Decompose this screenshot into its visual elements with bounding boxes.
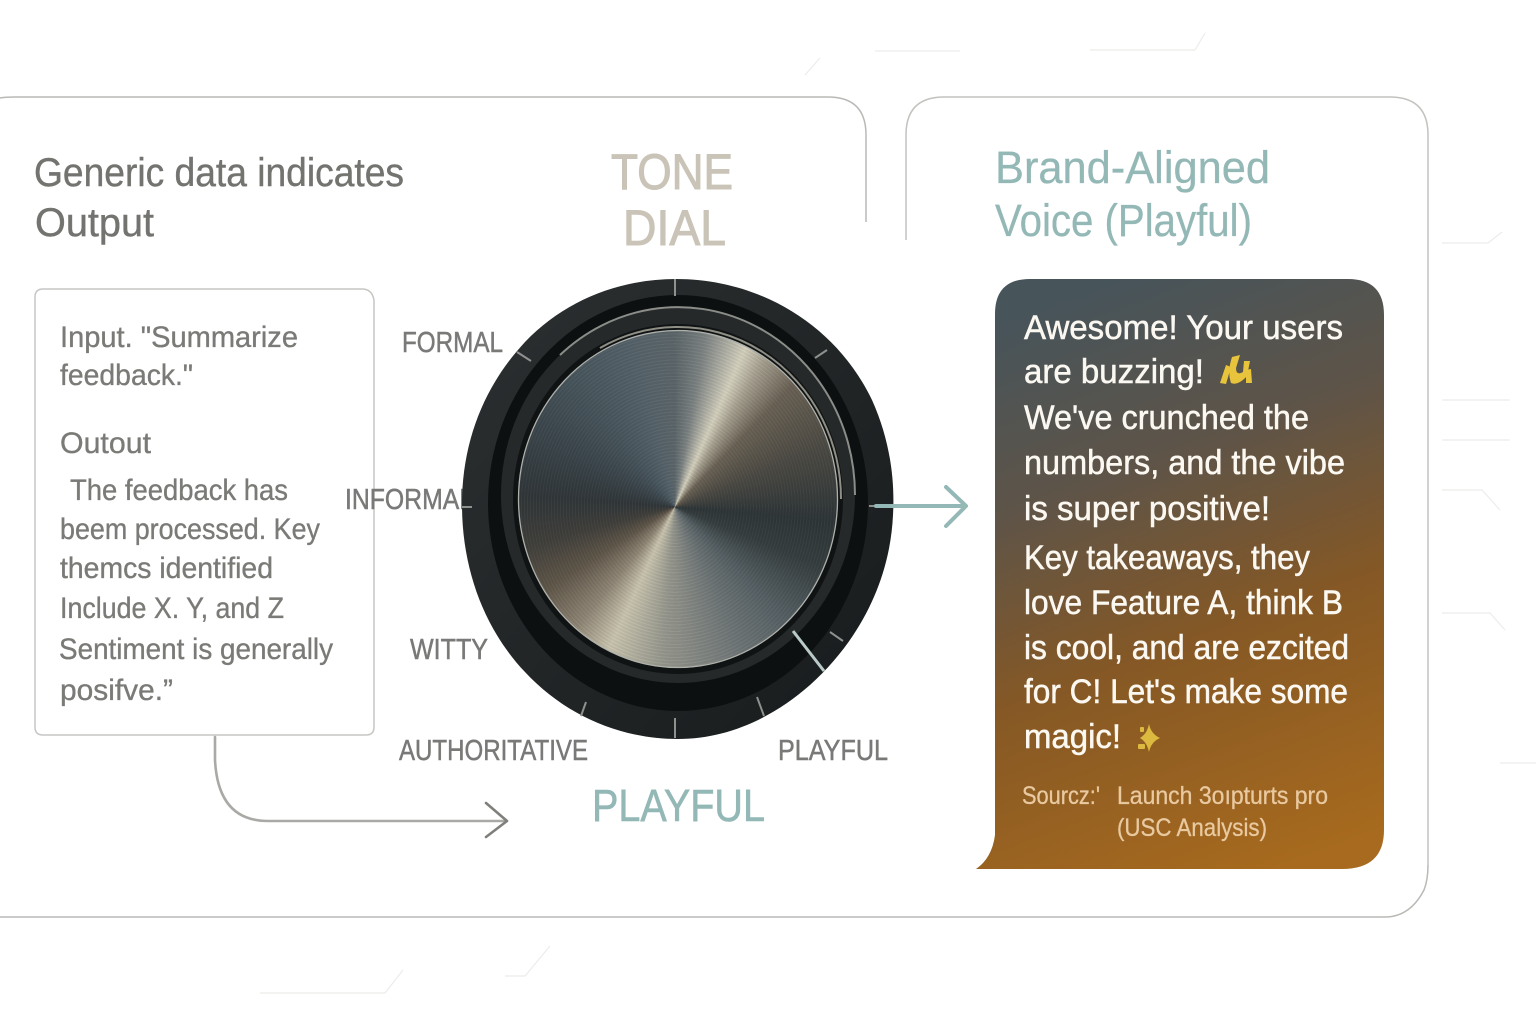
bubble source: Launch 3oıpturts pro <box>1117 782 1328 810</box>
heading: tone dial: TONE <box>611 144 733 200</box>
outer bezel <box>462 279 893 739</box>
bubble message <box>1024 309 1349 756</box>
heading: brand-aligned voice: Brand-Aligned <box>995 142 1270 193</box>
bubble message: Awesome! Your users <box>1024 309 1343 347</box>
bubble message: We've crunched the <box>1024 399 1309 437</box>
dial labels: INFORMAL <box>345 484 473 516</box>
icon: sparkle <box>1138 724 1160 752</box>
input card text: themcs identified <box>60 552 273 585</box>
heading: generic data indicates output <box>34 151 404 245</box>
bubble message: is cool, and are ezcited <box>1024 629 1349 667</box>
input card text: Outout <box>60 427 152 460</box>
dial labels <box>345 327 888 767</box>
arrow: dial to output <box>876 487 966 526</box>
bubble message: for C! Let's make some <box>1024 673 1348 711</box>
selected tone label: PLAYFUL <box>592 780 765 831</box>
input card text: The feedback has <box>70 474 288 507</box>
icon: buzzing emoji <box>1220 355 1252 384</box>
bubble message: is super positive! <box>1024 490 1270 528</box>
tone dial knob <box>462 279 894 739</box>
bubble source <box>1022 782 1328 842</box>
heading: tone dial: DIAL <box>623 200 726 256</box>
dial labels: PLAYFUL <box>778 735 888 767</box>
heading: generic data indicates output: Output <box>35 201 154 245</box>
input card text: posifve.” <box>60 674 173 707</box>
dial labels: FORMAL <box>402 327 503 359</box>
input card text <box>59 321 333 707</box>
face highlight rim <box>518 330 838 668</box>
panel: brand-aligned voice <box>906 97 1428 865</box>
input card text: Input. "Summarize <box>60 321 298 354</box>
bubble message: love Feature A, think B <box>1024 584 1343 622</box>
dial labels: WITTY <box>410 634 488 666</box>
bubble message: numbers, and the vibe <box>1024 444 1345 482</box>
bubble source: (USC Analysis) <box>1117 814 1267 842</box>
heading: generic data indicates output: Generic data indicates <box>34 151 404 195</box>
bubble message: are buzzing! <box>1024 353 1204 391</box>
heading: brand-aligned voice: Voice (Playful) <box>995 195 1252 246</box>
heading: brand-aligned voice <box>995 142 1270 246</box>
input card text: feedback." <box>60 359 193 392</box>
bubble source: Sourcz:' <box>1022 782 1100 810</box>
input card <box>35 289 374 735</box>
dial ticks <box>462 279 875 738</box>
bubble message: magic! <box>1024 718 1121 756</box>
input card text: Sentiment is generally <box>59 633 333 666</box>
panel: generic output <box>0 97 1428 917</box>
speech bubble <box>976 279 1384 869</box>
input card text: Include X. Y, and Z <box>60 592 284 625</box>
arrow: input card to playful <box>215 737 507 837</box>
bubble message: Key takeaways, they <box>1024 539 1310 577</box>
input card text: beem processed. Key <box>60 513 320 546</box>
inner rings <box>488 295 868 711</box>
dial labels: AUTHORITATIVE <box>399 735 588 767</box>
heading: tone dial <box>611 144 733 256</box>
dial pointer <box>793 631 824 671</box>
